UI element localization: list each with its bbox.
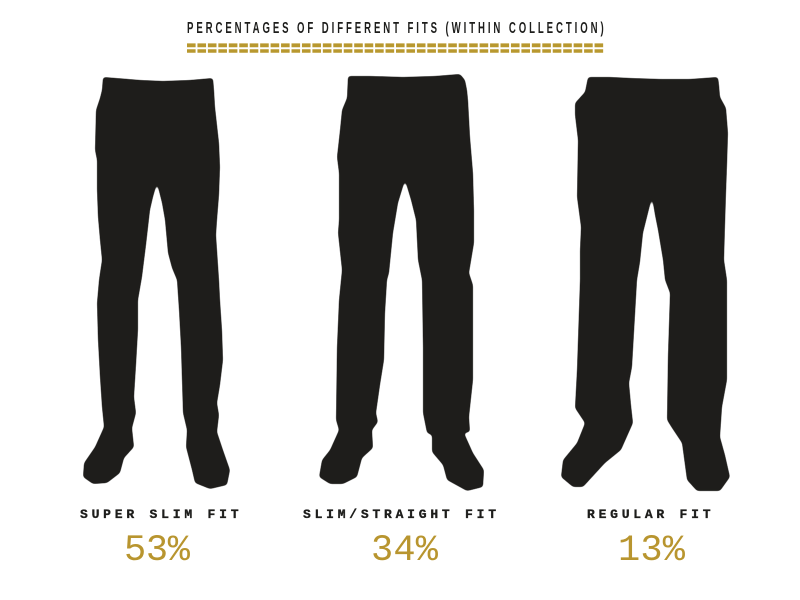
silhouette: super slim trousers — [83, 77, 230, 489]
label: slim/straight fit: SLIM/STRAIGHT FIT — [303, 507, 496, 522]
title underline: double dashed rule — [187, 45, 604, 51]
panel: slim/straight fit — [303, 74, 496, 572]
value: 34%: 34% — [371, 530, 439, 572]
silhouette: slim/straight trousers — [319, 74, 484, 491]
title: PERCENTAGES OF DIFFERENT FITS (WITHIN COLLECTION) — [187, 19, 604, 37]
panel: super slim fit — [80, 77, 239, 572]
value: 13%: 13% — [618, 530, 686, 572]
label: super slim fit: SUPER SLIM FIT — [80, 507, 239, 522]
value: 53%: 53% — [124, 530, 191, 572]
panel: regular fit — [561, 77, 730, 572]
label: regular fit: REGULAR FIT — [587, 507, 711, 522]
silhouette: regular trousers — [561, 77, 730, 491]
